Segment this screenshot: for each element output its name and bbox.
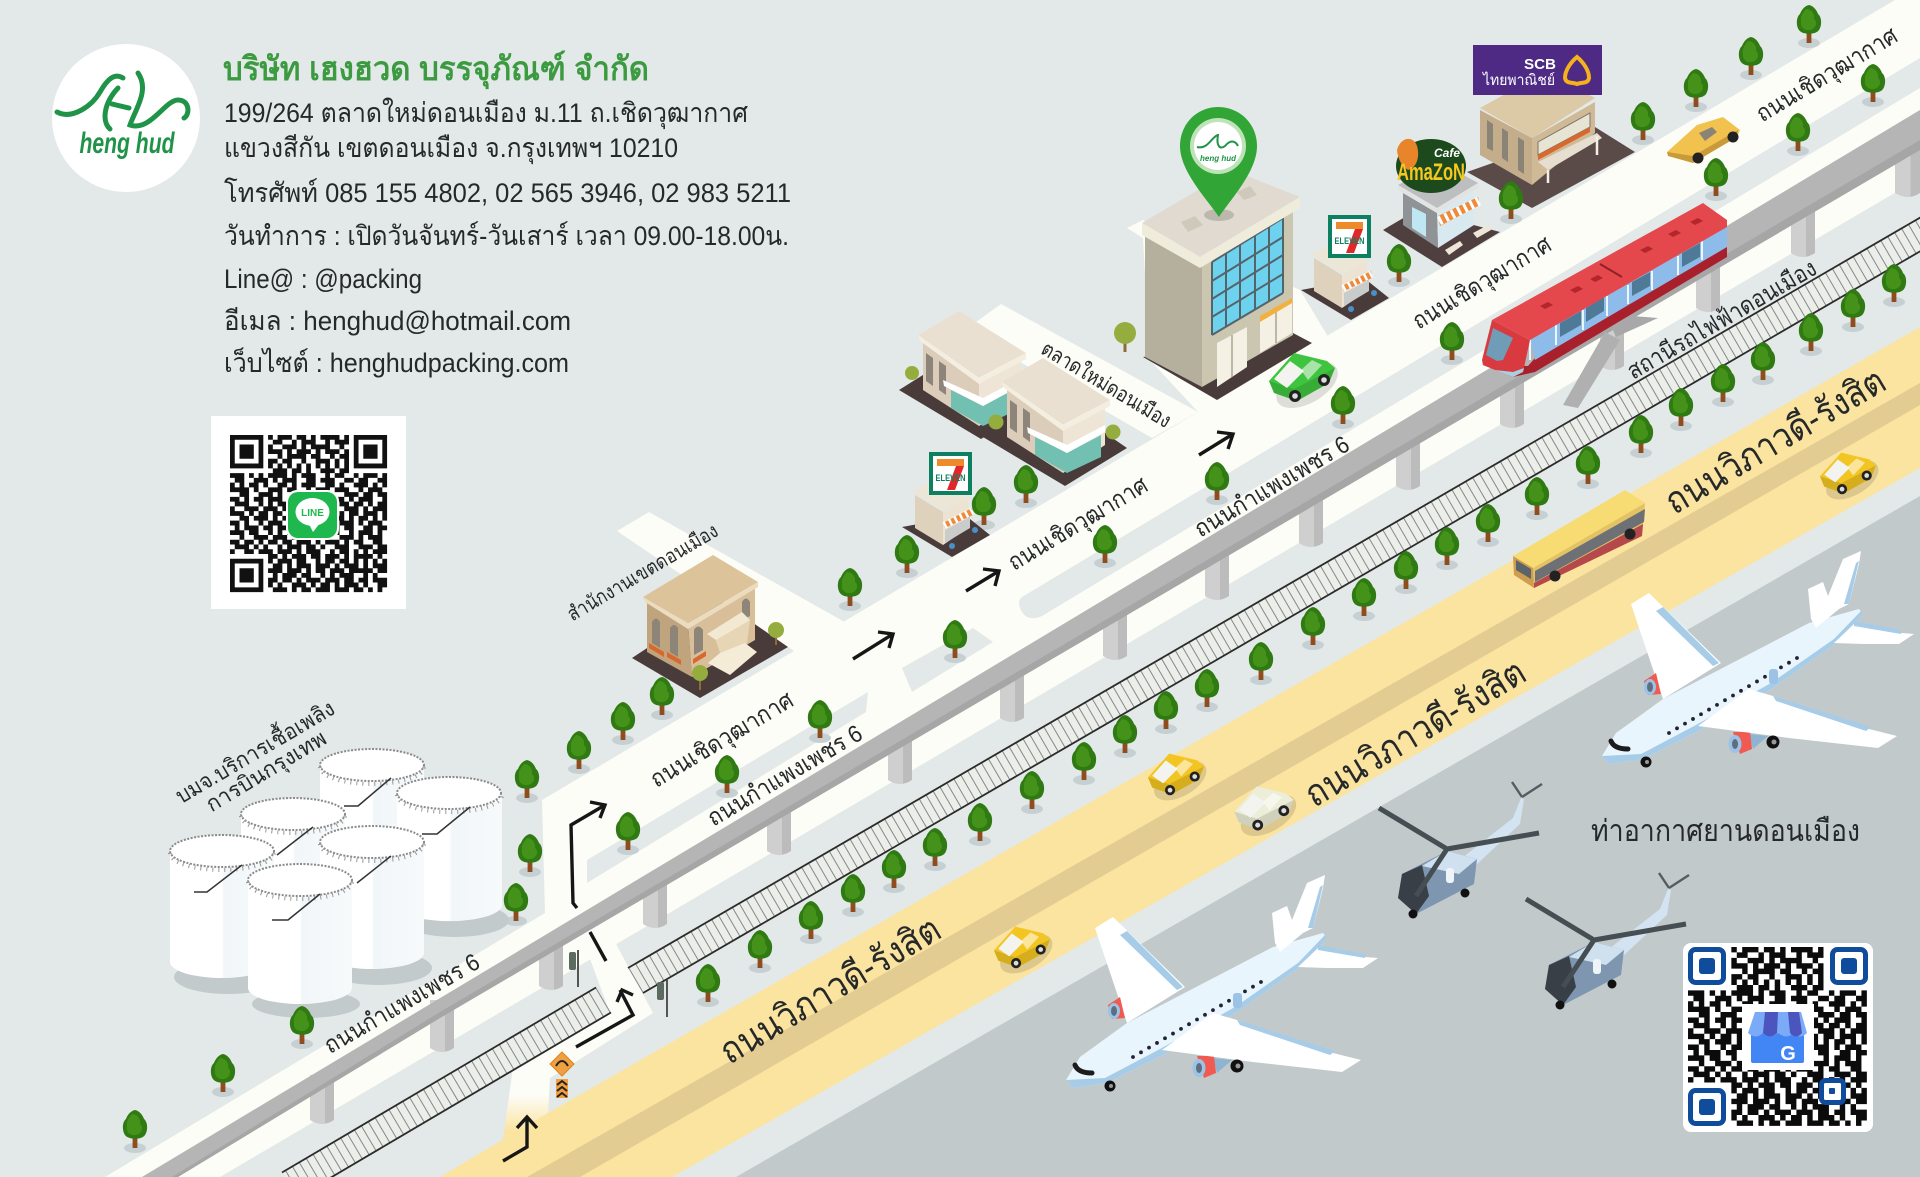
vibhavadi rangsit road [440,327,1920,1177]
viaduct pillars [310,145,1920,1124]
SCB sign [1473,45,1602,95]
arrow: crossing segment [590,932,606,961]
market buildings [899,311,1127,486]
tree by 7-eleven [1387,244,1411,287]
line id: Line@ : @packing [224,264,422,294]
yellow taxi left [994,926,1059,982]
logo [52,44,200,192]
label: bafs line 2: การบินกรุงเทพ [201,725,331,818]
median islands [587,58,1920,883]
lower road under viaduct [165,150,1920,1177]
yellow taxi right [1820,452,1885,508]
phone: โทรศัพท์ 085 155 4802, 02 565 3946, 02 983 5211 [224,177,791,208]
railway track left [282,988,611,1177]
Google Maps QR code [1683,943,1873,1132]
city bus [1513,490,1645,588]
elevated station stairs [1563,314,1658,408]
contact details [224,97,791,378]
tank front left [170,835,282,994]
airplane lower [1066,875,1378,1092]
address line 1: 199/264 ตลาดใหม่ดอนเมือง ม.11 ถ.เชิดวุฒากาศ [224,97,748,130]
market building front [983,358,1127,486]
red sky train [1482,203,1727,377]
label: vibhavadi middle: ถนนวิภาวดี-รังสิต [1297,651,1533,815]
LINE QR code [211,416,406,609]
level crossing road [503,940,653,1140]
label: sky train station: สถานีรถไฟฟ้าดอนเมือง [1622,254,1821,385]
label: chert wutthakat lower: ถนนเชิดวุฒากาศ [646,687,799,794]
label: kamphaeng phet right: ถนนกำแพงเพชร 6 [1190,431,1354,543]
traffic light left [569,950,578,987]
map pin with logo [1180,107,1257,217]
oil storage tanks [170,749,509,1018]
label: vibhavadi right: ถนนวิภาวดี-รังสิต [1657,360,1893,522]
arrow: road one [853,632,893,659]
SCB bank building [1467,72,1635,208]
cafe amazon logo [1396,139,1466,193]
railway track right [628,216,1920,993]
helicopter upper [1379,782,1542,918]
tank back [320,749,432,904]
arrow: road three [1199,432,1233,455]
icon: LINE: LINE [301,508,324,519]
green car [1269,352,1345,418]
tank front [248,864,360,1018]
arrow: road two [966,569,999,591]
label: kamphaeng phet middle: ถนนกำแพงเพชร 6 [703,720,867,832]
QR finder marks [1688,947,1868,1126]
label: vibhavadi left: ถนนวิภาวดี-รังสิต [712,908,948,1072]
label: kamphaeng phet left: ถนนกำแพงเพชร 6 [319,949,485,1059]
company title: บริษัท เฮงฮวด บรรจุภัณฑ์ จำกัด [223,50,649,90]
white van [1234,786,1303,845]
arrow: off vibhavadi road [503,1117,537,1161]
tank middle back [241,798,345,941]
SCB sign: SCB [1524,56,1556,73]
icon: LINE [286,490,339,540]
market building back [899,311,1043,439]
direction arrows [503,432,1233,1161]
label: chert wutthakat middle: ถนนเชิดวุฒากาศ [1003,472,1153,577]
icon: Google Business store: G [1780,1043,1796,1065]
main building Heng Hud [1142,170,1312,400]
tree below tanks [290,1006,314,1049]
district office building [632,555,788,698]
label: chert wutthakat by shops: ถนนเชิดวุฒากาศ [1408,231,1557,336]
tank right [397,777,509,937]
arrow: across the rail [576,990,633,1047]
trees beside vibhavadi road [696,264,1906,1007]
yellow pickup truck [1667,117,1740,164]
label: don mueang district office: สำนักงานเขตดอนเมือง [564,520,722,626]
label: bafs line 1: บมจ.บริการเชื้อเพลิง [170,693,339,808]
label: chert wutthakat top right: ถนนเชิดวุฒากาศ [1751,22,1903,129]
opening hours: วันทำการ : เปิดวันจันทร์-วันเสาร์ เวลา 09.00-18.00น. [224,220,789,251]
tree by market [972,487,996,530]
yellow taxi middle [1148,753,1213,809]
label: don mueang airport: ท่าอากาศยานดอนเมือง [1591,815,1860,848]
olive tree near main building [1114,322,1136,352]
email: อีเมล : henghud@hotmail.com [224,306,571,336]
map pin with logo: heng hud [1200,154,1237,163]
7-eleven store on chert wutthakat [1301,215,1389,320]
SCB sign: ไทยพาณิชย์ [1482,71,1555,89]
logo: heng hud [80,127,175,160]
icon: Google Business store [1742,1004,1814,1070]
airplane upper [1602,551,1914,768]
market shrubs [905,366,1120,440]
tank middle front [320,826,432,985]
cafe amazon shop [1383,139,1500,267]
cafe amazon logo: AmaZoN [1397,159,1465,186]
trees on median [616,64,1885,855]
warning sign [550,1052,574,1098]
label: don mueang new market: ตลาดใหม่ดอนเมือง [1037,336,1175,433]
arrow: turn into chert wutthakat [571,802,605,908]
helicopter lower [1526,873,1689,1010]
airport apron [736,496,1920,1177]
traffic light right [657,980,667,1017]
7-eleven store near market [902,452,990,557]
tree in front of SCB [1499,181,1523,224]
cafe amazon logo: Cafe [1434,146,1460,160]
website: เว็บไซต์ : henghudpacking.com [224,345,569,378]
address line 2: แขวงสีกัน เขตดอนเมือง จ.กรุงเทพฯ 10210 [224,133,678,165]
